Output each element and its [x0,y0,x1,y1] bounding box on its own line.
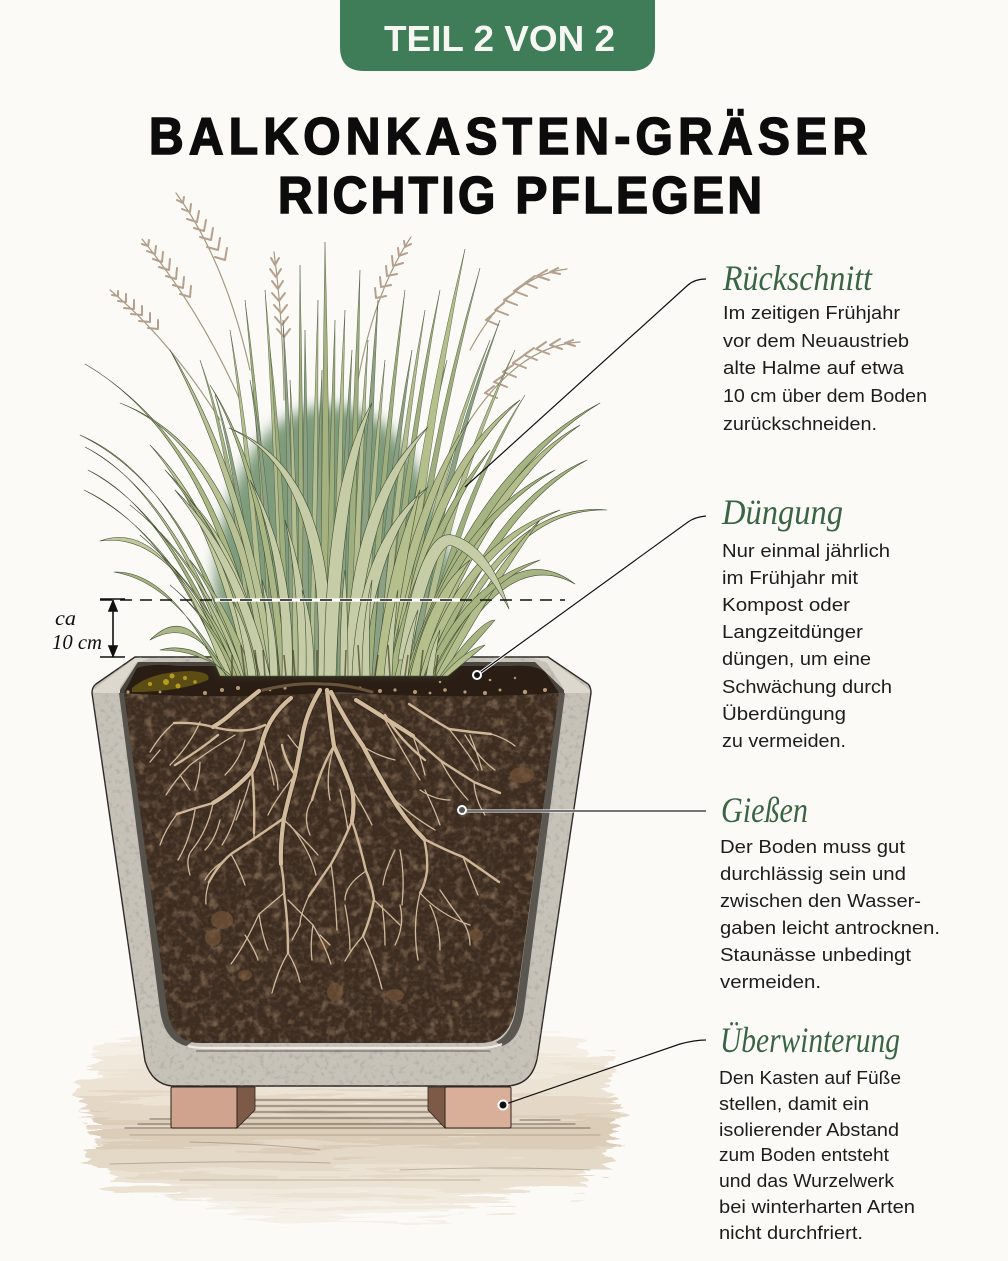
right foot [428,1087,511,1128]
body: Überwinterung: stellen, damit ein [719,1093,869,1114]
root shadow [213,690,424,864]
pot interior back wall [120,662,564,696]
leader lines [458,279,706,1110]
body: Gießen: durchlässig sein und [720,863,906,884]
body: Rückschnitt: vor dem Neuaustrieb [723,330,909,351]
dark base mass [228,640,445,676]
arching blades right [380,400,607,676]
pot body [92,657,591,1086]
inner wall right [496,693,565,1046]
fine roots [150,720,515,993]
body: Überwinterung: zum Boden entsteht [719,1144,889,1165]
soil texture light [124,694,559,1043]
body: Düngung: im Frühjahr mit [722,567,858,588]
body: Überwinterung: Den Kasten auf Füße [719,1067,901,1088]
main roots [213,690,424,864]
dimension arrow [100,599,125,657]
text block: Düngung [721,492,892,751]
body: Rückschnitt: zurückschneiden. [723,413,877,434]
heading: Gießen: Gießen [721,790,808,830]
left foot [171,1087,255,1128]
leader: Rückschnitt [465,279,706,487]
dimension label [52,606,102,654]
body: Rückschnitt [723,302,927,434]
ground wash [80,1038,620,1216]
body: Überwinterung: bei winterharten Arten [719,1196,915,1217]
roots [150,684,515,993]
body: Düngung: düngen, um eine [722,648,871,669]
leader: Überwinterung [498,1040,706,1110]
body: Düngung [722,540,892,751]
inner lower line [196,1050,490,1052]
front blades [175,403,509,676]
surface grit [126,677,547,695]
moss patch [132,671,209,692]
body: Gießen: vermeiden. [720,971,821,992]
body: Gießen [720,836,940,992]
body: Düngung: Überdüngung [722,703,846,724]
body: Überwinterung: nicht durchfriert. [719,1222,863,1243]
text block: Rückschnitt [722,258,927,434]
badge: Teil 2 von 2 [340,0,655,71]
ground streaks [110,1100,600,1180]
blade bases [232,645,438,676]
body: Gießen: gaben leicht antrocknen. [720,917,940,938]
leader: Düngung [473,516,706,679]
body: Rückschnitt: alte Halme auf etwa [723,357,905,378]
dimension label: 10 cm [52,630,102,654]
text block: Gießen [720,790,940,992]
body: Düngung: Kompost oder [722,594,850,615]
body: Gießen: Staunässe unbedingt [720,944,911,965]
title: RICHTIG PFLEGEN [278,166,762,224]
inner lower highlight [188,1044,502,1048]
spikelets [112,197,575,398]
body: Düngung: Schwächung durch [722,676,892,697]
heading: Überwinterung: Überwinterung [720,1020,900,1060]
body: Überwinterung: isolierender Abstand [719,1119,899,1140]
moss highlights [148,674,197,688]
heading: Rückschnitt: Rückschnitt [722,258,873,298]
title: BALKONKASTEN-GRÄSER [149,107,867,165]
clods [205,767,534,1001]
body: Rückschnitt: 10 cm über dem Boden [723,385,927,406]
arching blades left [80,350,286,676]
body: Düngung: Langzeitdünger [722,621,863,642]
soil [124,694,559,1043]
upright thin blades [200,242,525,676]
stems [110,193,580,420]
planter [92,657,591,1086]
body: Überwinterung [719,1067,915,1243]
pot texture [92,657,591,1086]
backing mass [214,406,454,668]
feet [171,1087,511,1128]
body: Rückschnitt: Im zeitigen Frühjahr [723,302,900,323]
rim left [93,658,150,693]
leader: Gießen [458,806,706,814]
soil texture dark [124,694,559,1043]
body: Überwinterung: und das Wurzelwerk [719,1170,895,1191]
cut line [100,598,565,602]
height measure: ca 10 cm [52,599,565,657]
inner wall left [119,693,192,1046]
root crown [259,684,372,692]
grass clump [80,193,607,676]
body: Gießen: zwischen den Wasser- [720,890,921,911]
body: Düngung: zu vermeiden. [722,730,846,751]
dimension label: ca [55,606,76,630]
title [149,107,867,224]
body: Düngung: Nur einmal jährlich [722,540,890,561]
heading: Düngung: Düngung [721,492,843,532]
secondary roots [174,704,500,953]
text block: Überwinterung [719,1020,915,1243]
seed heads [110,193,580,420]
body: Gießen: Der Boden muss gut [720,836,905,857]
badge: Teil 2 von 2: TEIL 2 VON 2 [384,18,615,59]
rim right [533,658,590,693]
soil surface [124,665,559,696]
